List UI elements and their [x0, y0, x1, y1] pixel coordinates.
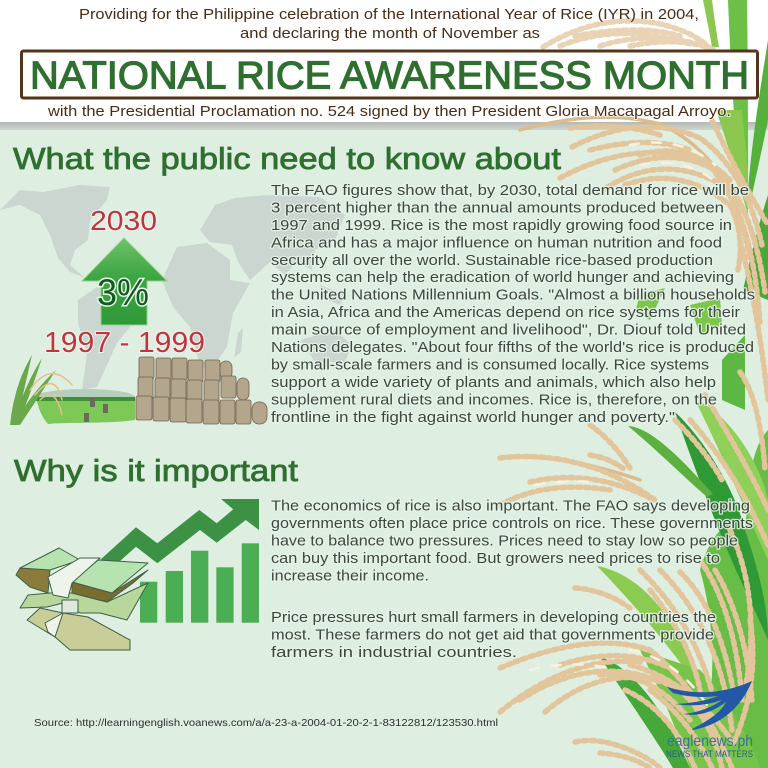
- label: 3 percent: 3%: [97, 272, 149, 313]
- body text: what the public need to know: support a wide variety of plants and animals, which also help: [271, 374, 716, 391]
- body text: what the public need to know: 3 percent higher than the annual amounts produced between: [271, 199, 724, 216]
- paper band middle: [62, 600, 78, 613]
- body text: economics: [271, 498, 753, 584]
- body text: what the public need to know: the United Nations Millennium Goals. "Almost a billion households: [271, 287, 755, 304]
- logo name: eaglenews.ph: [667, 733, 753, 750]
- intro line 1: Providing for the Philippine celebration of the International Year of Rice (IYR) in 2004,: [79, 6, 699, 23]
- label: 2030: 2030: [90, 205, 157, 236]
- body text: what the public need to know: The FAO figures show that, by 2030, total demand for rice will be: [271, 182, 749, 199]
- title: NATIONAL RICE AWARENESS MONTH: [30, 54, 749, 98]
- intro line 2: and declaring the month of November as: [240, 25, 540, 42]
- chart: rising bars and arrow: [100, 499, 259, 623]
- middle bundle: [20, 583, 148, 620]
- body text: economics: The economics of rice is also important. The FAO says developing: [271, 498, 750, 515]
- icon: money stacks: [16, 548, 148, 650]
- icon: growth arrow: [82, 238, 167, 325]
- body text: what the public need to know: supplement rural diets and incomes. Rice is, therefore, on the: [271, 391, 717, 408]
- icon: eagle wing: [667, 681, 752, 730]
- top bundle note right: [72, 560, 148, 593]
- source: Source: http://learningenglish.voanews.com/a/a-23-a-2004-01-20-2-1-83122812/123530.html: [34, 717, 498, 729]
- body text: what the public need to know: main source of employment and livelihood", Dr. Diouf told United: [271, 322, 746, 339]
- proclamation line: with the Presidential Proclamation no. 524 signed by then President Gloria Macapagal Arroyo.: [47, 103, 731, 120]
- body text: economics: can buy this important food. But growers need prices to rise to: [271, 550, 720, 567]
- body text: economics: increase their income.: [271, 567, 429, 584]
- world map: [0, 185, 352, 390]
- body text: what the public need to know: 1997 and 1999. Rice is the most rapidly growing food source in: [271, 217, 732, 234]
- body text: economics: governments often place price controls on rice. These governments: [271, 515, 753, 532]
- label: 1997 - 1999: 1997 - 1999: [44, 327, 205, 359]
- illustration: rice field: [10, 355, 135, 425]
- body text: price pressures: most. These farmers do not get aid that governments provide: [271, 626, 714, 644]
- body text: price pressures: [271, 609, 716, 661]
- body text: economics: have to balance two pressures. Prices need to stay low so people: [271, 533, 738, 550]
- body text: price pressures: Price pressures hurt small farmers in developing countries the: [271, 609, 716, 626]
- body text: what the public need to know: in Asia, Africa and the Americas depend on rice systems for their: [271, 304, 740, 321]
- body text: what the public need to know: frontline in the fight against world hunger and poverty.": [271, 409, 675, 426]
- heading: why is it important: Why is it important: [14, 453, 298, 488]
- logo: eagle news: [666, 681, 753, 759]
- heading banner lines: [79, 6, 699, 42]
- rice grains: [500, 21, 768, 768]
- illustration: rice sacks: [136, 357, 267, 424]
- paper band bottom: [45, 613, 63, 637]
- body text: what the public need to know: Nations delegates. "About four fifths of the world's rice is produced: [271, 339, 754, 356]
- body text: what the public need to know: [271, 182, 755, 426]
- title box: [22, 51, 758, 98]
- top bundle note left: [20, 548, 80, 570]
- logo tagline: NEWS THAT MATTERS: [666, 749, 753, 759]
- top bundle lower layers left: [16, 568, 50, 593]
- body text: price pressures: farmers in industrial countries.: [271, 644, 517, 661]
- bottom bundle: [27, 608, 130, 650]
- body text: what the public need to know: Africa and has a major influence on human nutrition and food: [271, 234, 722, 251]
- rice leaves: [597, 0, 768, 768]
- body text: what the public need to know: security all over the world. Sustainable rice-based production: [271, 252, 713, 269]
- top bundle lower layers right: [72, 570, 148, 602]
- paper band top: [48, 558, 100, 598]
- heading: what the public need to know: What the public need to know about: [13, 141, 561, 176]
- body text: what the public need to know: by small-scale farmers and is consumed locally. Rice systems: [271, 356, 709, 374]
- body text: what the public need to know: systems can help the eradication of world hunger and achieving: [271, 269, 734, 286]
